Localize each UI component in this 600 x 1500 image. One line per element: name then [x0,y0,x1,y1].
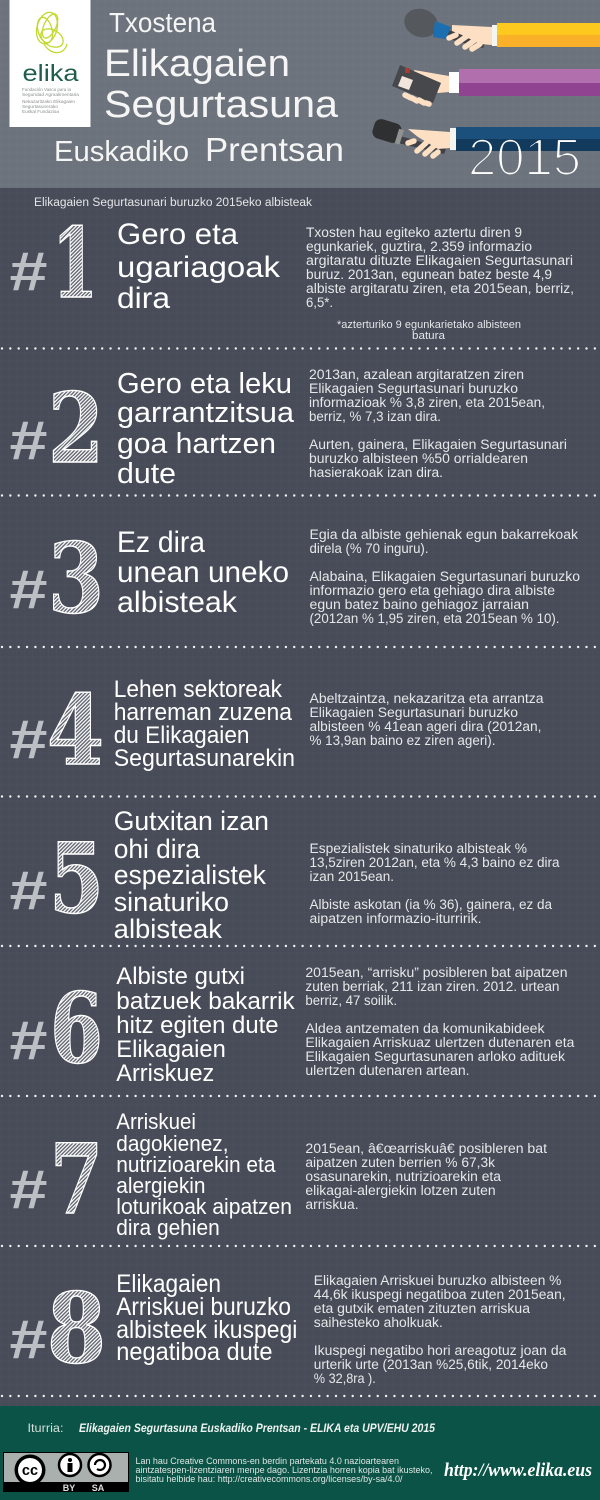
body text 5: 13,5ziren 2012an, eta % 4,3 baino ez dira [310,855,560,870]
number 2 [10,372,104,485]
title: Prentsan: Prentsan [205,131,344,168]
divider dots [2,348,600,1396]
footer panel [0,1406,600,1500]
section 2 [10,367,567,490]
body text 5: Espezialistek sinaturiko albisteak % [310,841,527,856]
body text 4: albisteen % 41ean ageri dira (2012an, [310,719,542,734]
body text 6: Elikagaien Segurtasunaren arloko adituek [305,1049,565,1064]
number 1: 1 [52,207,98,320]
number 5: # [10,859,48,921]
section 7 [10,1109,547,1240]
heading 8: Arriskuei buruzko [116,1293,291,1321]
logo: elika [10,0,90,127]
heading 4: harreman zuzena [114,699,292,726]
heading 4: du Elikagaien [114,722,250,749]
number 5 [10,822,104,935]
background: header band [0,0,600,188]
icon: hand with navy sleeve and microphone [371,117,600,156]
body text 1 [306,225,574,310]
heading 2: Gero eta leku [117,368,292,400]
heading 7: dira gehien [116,1215,220,1240]
body text 6: Elikagaien Arriskuaz ulertzen dutenaren eta [305,1035,575,1050]
body text 4: % 13,9an baino ez ziren ageri). [310,733,496,748]
heading 5: espezialistek [114,860,266,890]
body text 6: 2015ean, “arrisku” posibleren bat aipatzen [305,965,568,980]
body text 6: berriz, 47 soilik. [305,993,397,1008]
section 4 [10,674,544,787]
body text 6 [305,965,575,1078]
body text 7: arriskua. [305,1197,359,1212]
body text 2 [309,367,567,480]
heading 5: Gutxitan izan [114,806,269,836]
footnote [337,319,521,342]
heading 8: negatiboa dute [116,1338,272,1366]
heading 3: unean uneko [117,556,289,589]
logo: elika: Nekazaritzako Elikagaien [22,99,75,104]
body text 6: zuten berriak, 211 izan ziren. 2012. urtean [305,979,560,994]
body text 2: Aurten, gainera, Elikagaien Segurtasunari [309,437,567,452]
body text 6: ulertzen dutenaren artean. [305,1063,470,1078]
body text 3 [310,527,580,626]
icon: Creative Commons BY-SA badge: cc [22,1463,38,1479]
heading 5: sinaturiko [114,887,229,917]
title: Segurtasuna: Segurtasuna [104,84,339,126]
number 4 [10,674,104,787]
number 7: 7 [50,1123,103,1236]
number 7 [10,1123,103,1236]
body text 2: buruzko albisteen %50 orrialdearen [309,451,528,466]
logo: elika: Euskal Fundazioa [22,109,59,114]
section 3 [10,522,580,635]
body text 7: 2015ean, â€œarriskuâ€ posibleren bat [305,1141,547,1156]
body text 2: berriz, % 7,3 izan dira. [309,409,441,424]
year 2015: 2015 [468,129,581,187]
license text: bisitatu helbide hau: http://creativecommons.org/licenses/by-sa/4.0/ [136,1474,403,1484]
heading 1: ugariagoak [117,251,281,284]
heading 5: ohi dira [114,834,201,864]
body text 1: buruz. 2013an, egunean batez beste 4,9 [306,267,552,282]
title: Euskadiko: Euskadiko [54,136,189,168]
heading 1: Gero eta [117,218,238,251]
heading 6: Elikagaien [116,1036,226,1063]
section 8 [10,1270,567,1386]
heading 3: Ez dira [117,526,205,559]
body text 2: hasierakoak izan dira. [309,465,443,480]
body text 8: % 32,8ra ). [314,1371,376,1386]
footnote: *azterturiko 9 egunkarietako albisteen [337,319,521,331]
body text 2: 2013an, azalean argitaratzen ziren [309,367,524,382]
number 3 [10,522,104,635]
logo: elika: Fundación Vasca para la [22,87,71,92]
number 1: # [10,240,48,302]
body text 3: egun batez baino gehiagoz jarraian [310,597,529,612]
body text 1: albiste argitaratu ziren, eta 2015ean, berriz, [306,281,574,296]
logo: elika: Seguridad Agroalimentaria [22,92,79,97]
section 6 [10,963,575,1087]
number 2: # [10,409,48,471]
title: Txostena: Txostena [109,7,216,38]
heading 2 [117,368,295,490]
body text 5: izan 2015ean. [310,869,394,884]
heading 3: albisteak [117,586,238,619]
number 7: # [10,1158,48,1220]
heading 7: nutrizioarekin eta [116,1152,276,1177]
icon: Creative Commons BY-SA badge [3,1452,129,1493]
heading 2: garrantzitsua [117,397,295,429]
body text 1: egunkariek, guztira, 2.359 informazio [306,239,532,254]
icon: Creative Commons BY-SA badge: BY [63,1483,75,1493]
body text 3: informazio gero eta gehiago dira albiste [310,583,555,598]
body text 8: saihesteko aholkuak. [314,1315,443,1330]
number 8: 8 [47,1272,106,1385]
heading 1 [117,218,281,315]
section 5 [10,806,560,944]
number 6: 6 [50,972,103,1085]
license text: aintzatespen-lizentziaren menpe dago. Lizentzia horren kopia bat ikusteko, [136,1465,432,1475]
body text 4: Abeltzaintza, nekazaritza eta arrantza [310,691,544,706]
logo: elika: elika [22,60,79,86]
heading 7: alergiekin [116,1173,206,1198]
body text 7: osasunarekin, nutrizioarekin eta [305,1169,502,1184]
heading 4: Segurtasunarekin [114,745,295,772]
body text 1: Txosten hau egiteko aztertu diren 9 [306,225,522,240]
body text 4: Elikagaien Segurtasunari buruzko [310,705,518,720]
body text 3: Egia da albiste gehienak egun bakarrekoak [310,527,578,542]
body text 3: (2012an % 1,95 ziren, eta 2015ean % 10). [310,611,560,626]
body text 1: 6,5*. [306,295,333,310]
heading 8: Elikagaien [116,1270,221,1298]
heading 2: dute [117,458,176,490]
body text 5 [310,841,560,926]
body text 3: direla (% 70 inguru). [310,541,428,556]
heading 4 [114,676,295,772]
source label: Iturria: [28,1423,64,1435]
license text: Lan hau Creative Commons-en berdin partekatu 4.0 nazioartearen [136,1456,399,1466]
number 4: # [10,708,48,770]
body text 8: Ikuspegi negatibo hori areagotuz joan da [314,1343,567,1358]
body text 3: Alabaina, Elikagaien Segurtasunari buruzko [310,569,580,584]
body text 8: urterik urte (2013an %25,6tik, 2014eko [314,1357,548,1372]
number 6 [10,972,103,1085]
body text 7: aipatzen zuten berrien % 67,3k [305,1155,495,1170]
license text [136,1456,432,1484]
heading 6 [116,963,295,1087]
title: Elikagaien: Elikagaien [104,43,290,85]
icon: Creative Commons BY-SA badge: SA [92,1483,105,1493]
number 3: # [10,558,48,620]
body text 8: eta gutxik ematen zituzten arriskua [314,1301,531,1316]
number 2: 2 [48,372,104,485]
body text 8 [314,1273,567,1386]
heading 6: hitz egiten dute [116,1012,279,1039]
heading 5 [114,806,269,944]
footnote: batura [412,330,446,342]
body text 6: Aldea antzematen da komunikabideek [305,1021,545,1036]
number 8: # [10,1308,48,1370]
heading 6: batzuek bakarrik [116,988,295,1015]
number 3: 3 [48,522,104,635]
heading 7: loturikoak aipatzen [116,1194,292,1219]
body text 4 [310,691,544,748]
body text 5: Albiste askotan (ia % 36), gainera, ez da [310,897,552,912]
number 5: 5 [49,822,104,935]
source title: Elikagaien Segurtasuna Euskadiko Prentsan - ELIKA eta UPV/EHU 2015 [79,1423,436,1435]
logo: elika: Segurtasunerako [22,104,58,109]
heading 7: dagokienez, [116,1131,228,1156]
body text 7: elikagai-alergiekin lotzen zuten [305,1183,496,1198]
heading 1: dira [117,282,170,315]
number 4: 4 [47,674,104,787]
heading 6: Albiste gutxi [116,963,245,990]
icon: hand with yellow sleeve and microphone [401,4,600,49]
heading 5: albisteak [114,914,222,944]
body text 1: argitaratu dituzte Elikagaien Segurtasunari [306,253,573,268]
body text 5: aipatzen informazio-iturririk. [310,911,482,926]
heading 4: Lehen sektoreak [114,676,283,703]
subtitle: Elikagaien Segurtasunari buruzko 2015eko albisteak [34,197,312,209]
number 8 [10,1272,106,1385]
body text 8: 44,6k ikuspegi negatiboa zuten 2015ean, [314,1287,566,1302]
website url: http://www.elika.eus [444,1460,592,1481]
header [10,0,600,187]
section 1 [10,207,574,342]
heading 7 [116,1109,292,1240]
heading 2: goa hartzen [117,428,276,460]
heading 8 [116,1270,297,1366]
body text 2: Elikagaien Segurtasunari buruzko [309,381,518,396]
heading 8: albisteek ikuspegi [116,1316,297,1344]
heading 7: Arriskuei [116,1109,196,1134]
number 1 [10,207,98,320]
body text 8: Elikagaien Arriskuei buruzko albisteen % [314,1273,561,1288]
heading 3 [117,526,289,619]
number 6: # [10,1009,48,1071]
heading 6: Arriskuez [116,1060,214,1087]
body text 2: informazioak % 3,8 ziren, eta 2015ean, [309,395,545,410]
icon: hand with purple sleeve and recorder [392,65,600,104]
body text 7 [305,1141,547,1212]
